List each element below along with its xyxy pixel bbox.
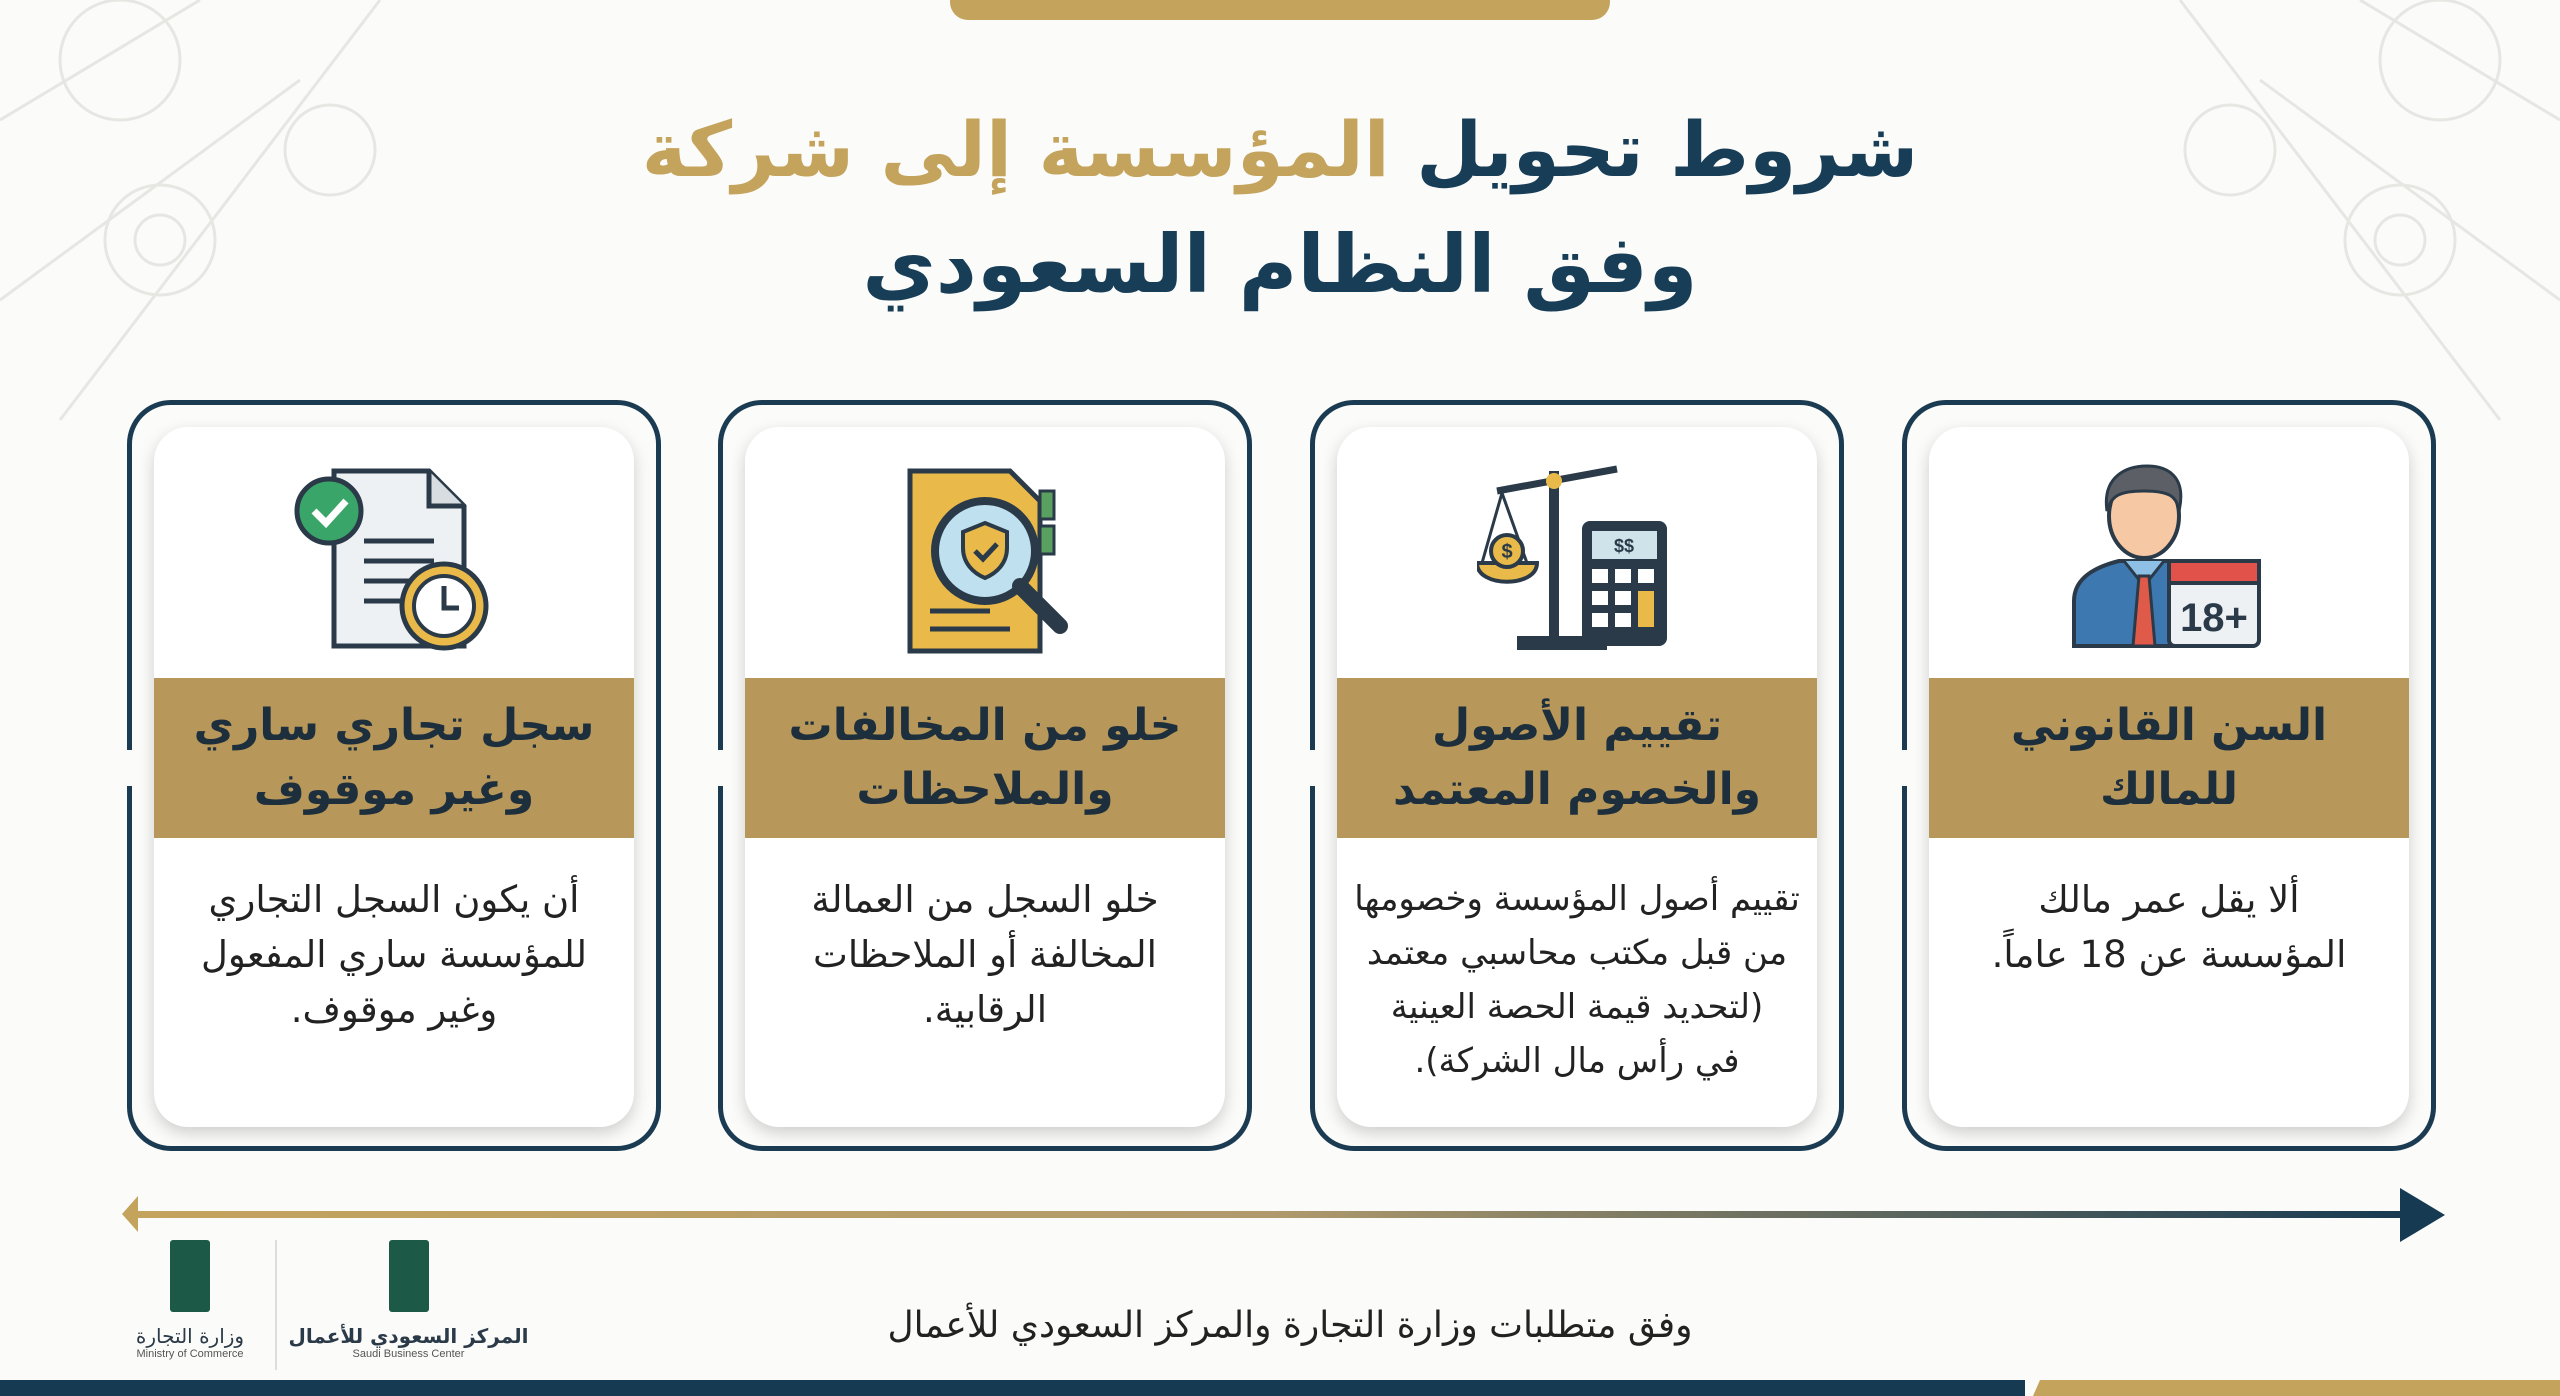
logo: saudi business center bbox=[275, 1240, 540, 1370]
description: وغير موقوف. bbox=[291, 988, 497, 1031]
description: المخالفة أو الملاحظات bbox=[813, 933, 1157, 976]
description bbox=[1992, 875, 2346, 976]
heading band bbox=[154, 678, 634, 838]
subtitle line: وفق النظام السعودي bbox=[862, 218, 1698, 311]
description: المؤسسة عن 18 عاماً. bbox=[1992, 933, 2346, 976]
panel: card 1 commercial register bbox=[127, 400, 661, 1151]
heading band: والملاحظات bbox=[856, 764, 1114, 815]
heading band: السن القانوني bbox=[2011, 700, 2327, 751]
icon: person with 18+ calendar bbox=[2072, 464, 2261, 648]
icon: document with clock bbox=[294, 468, 488, 650]
title: شروط تحويل المؤسسة إلى شركة bbox=[642, 105, 1918, 194]
description bbox=[811, 878, 1159, 1031]
description: في رأس مال الشركة). bbox=[1414, 1041, 1740, 1081]
arrow: timeline bbox=[122, 1188, 2445, 1242]
description: (لتحديد قيمة الحصة العينية bbox=[1391, 987, 1763, 1027]
footer note: وفق متطلبات وزارة التجارة والمركز السعودي للأعمال bbox=[887, 1305, 1693, 1346]
heading band: تقييم الأصول bbox=[1432, 700, 1722, 751]
heading band: خلو من المخالفات bbox=[788, 700, 1182, 751]
description bbox=[1354, 876, 1800, 1081]
panel: card 4 legal age bbox=[1902, 400, 2436, 1151]
panel: card 3 asset valuation bbox=[1310, 400, 1844, 1151]
heading band bbox=[745, 678, 1225, 838]
icon: scale and calculator: $ bbox=[1501, 541, 1513, 563]
bottom bar bbox=[0, 1380, 2560, 1396]
heading band: سجل تجاري ساري bbox=[194, 700, 594, 751]
description: تقييم أصول المؤسسة وخصومها bbox=[1354, 879, 1800, 919]
logo: saudi business center: المركز السعودي للأعمال bbox=[288, 1324, 528, 1348]
description: خلو السجل من العمالة bbox=[811, 878, 1159, 921]
description bbox=[201, 875, 587, 1031]
description: من قبل مكتب محاسبي معتمد bbox=[1367, 933, 1787, 973]
icon: folder with magnifier bbox=[908, 468, 1068, 654]
icon: scale and calculator bbox=[1477, 466, 1667, 650]
logo: ministry of commerce bbox=[136, 1240, 244, 1360]
panel: card 2 no violations bbox=[718, 400, 1252, 1151]
heading band bbox=[1337, 678, 1817, 838]
description: أن يكون السجل التجاري bbox=[209, 878, 579, 921]
logo: ministry of commerce: Ministry of Commerce bbox=[137, 1348, 243, 1360]
top gold bar bbox=[950, 0, 1610, 20]
heading band bbox=[1929, 678, 2409, 838]
description: للمؤسسة ساري المفعول bbox=[201, 933, 587, 976]
description: الرقابية. bbox=[923, 988, 1047, 1031]
heading band: للمالك bbox=[2100, 764, 2238, 815]
logo: ministry of commerce: وزارة التجارة bbox=[136, 1324, 244, 1348]
description: ألا يقل عمر مالك bbox=[2038, 878, 2300, 921]
heading band: والخصوم المعتمد bbox=[1393, 764, 1761, 815]
heading band: وغير موقوف bbox=[254, 764, 534, 815]
logo: saudi business center: Saudi Business Center bbox=[353, 1348, 464, 1360]
icon: scale and calculator: $$ bbox=[1614, 536, 1634, 556]
icon: person with 18+ calendar: 18+ bbox=[2180, 596, 2248, 640]
